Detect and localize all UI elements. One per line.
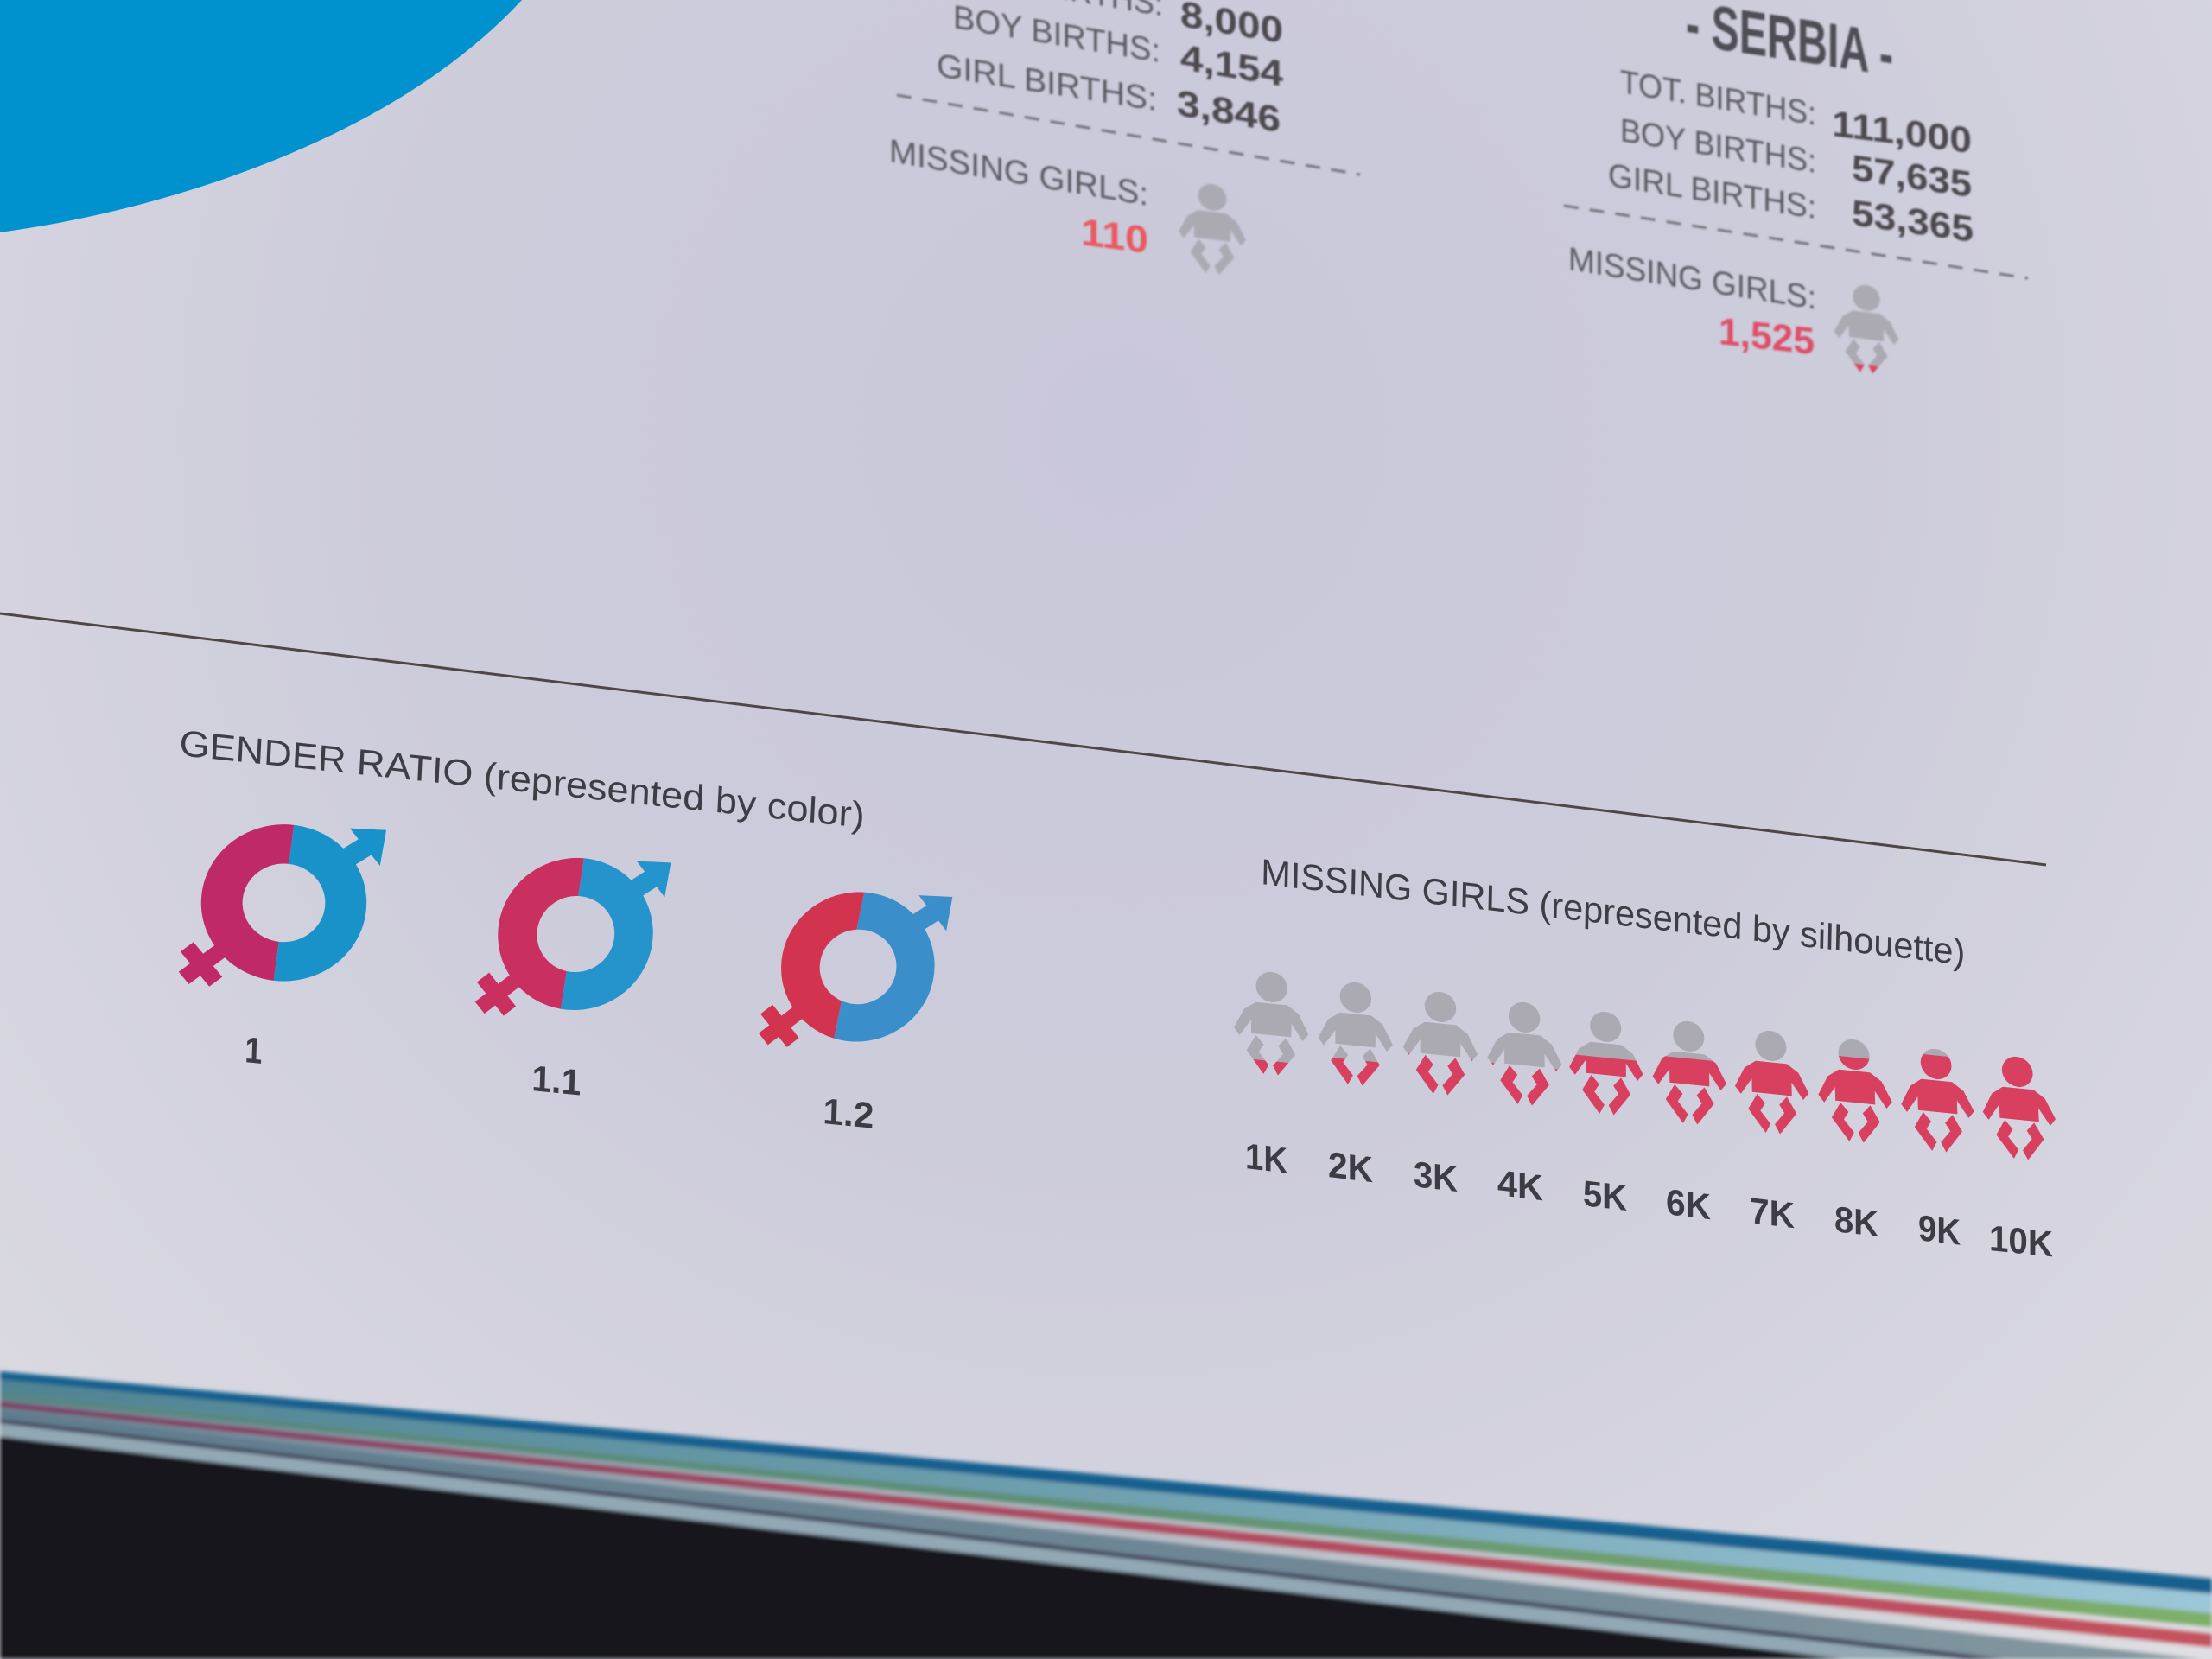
page stack edge [0,1371,2212,1659]
baby 3K [1403,988,1478,1098]
baby 1K [1233,969,1309,1078]
heading: missing girls: MISSING GIRLS (represented by silhouette) [1261,851,1966,973]
label 8K: 8K [1834,1198,1879,1244]
label: 1: 1 [245,1029,263,1071]
icon: baby with red feet [1834,281,1898,377]
total births row: 111,000 [1832,103,1972,161]
label 10K: 10K [1989,1217,2054,1264]
girl births row [937,47,1281,140]
panel: gender ratio legend [179,722,952,1136]
missing girls value: 110 [1081,211,1148,262]
male half [561,853,671,1019]
panel: country with 8,000 births [889,0,1360,279]
boy births row: BOY BIRTHS: [953,0,1160,70]
label 3K: 3K [1414,1154,1459,1199]
boy births row [1620,111,1972,205]
total births row [964,0,1283,51]
label 6K: 6K [1666,1181,1712,1227]
baby 2K [1318,979,1393,1089]
baby 6K [1651,1018,1727,1128]
blue circle corner [0,0,522,232]
label 4K: 4K [1497,1162,1544,1208]
baby 7K [1733,1027,1809,1137]
label 5K: 5K [1583,1173,1628,1218]
male half [834,886,952,1051]
female half [762,883,864,1048]
missing girls label: MISSING GIRLS: [1568,240,1816,317]
boy births row: 57,635 [1852,147,1972,205]
gender symbol ratio 1 [183,809,386,999]
label 2K: 2K [1328,1144,1374,1190]
gender symbol ratio 1.1 [479,843,671,1027]
missing girls label: MISSING GIRLS: [889,132,1148,213]
girl births row: GIRL BIRTHS: [937,47,1157,118]
male half [274,820,386,991]
boy births row [953,0,1284,94]
baby 5K [1568,1008,1643,1118]
baby 8K [1816,1036,1893,1146]
panel: Serbia [1564,0,2028,377]
missing girls value: 1,525 [1719,310,1815,363]
total births row: TOT. BIRTHS: [1620,63,1816,133]
total births row [1620,63,1972,161]
boy births row: 4,154 [1180,36,1284,94]
panel: missing girls legend [1233,851,2057,1264]
label 1K: 1K [1245,1135,1288,1181]
label 7K: 7K [1750,1190,1796,1236]
icon: grey baby [1179,180,1246,279]
label: 1.1: 1.1 [531,1058,582,1103]
female half [479,849,584,1017]
gender symbol ratio 1.2 [762,878,952,1058]
baby 4K [1487,999,1562,1109]
label: 1.2: 1.2 [823,1090,874,1136]
female half [183,815,294,988]
baby 10K [1980,1053,2057,1163]
girl births row [1608,156,1974,250]
girl births row: 3,846 [1177,82,1281,140]
boy births row: BOY BIRTHS: [1620,111,1816,181]
heading: gender ratio: GENDER RATIO (represented by color) [179,722,866,836]
girl births row: 53,365 [1852,192,1974,250]
girl births row: GIRL BIRTHS: [1608,156,1816,226]
baby 9K [1899,1046,1975,1155]
label 9K: 9K [1918,1207,1961,1253]
